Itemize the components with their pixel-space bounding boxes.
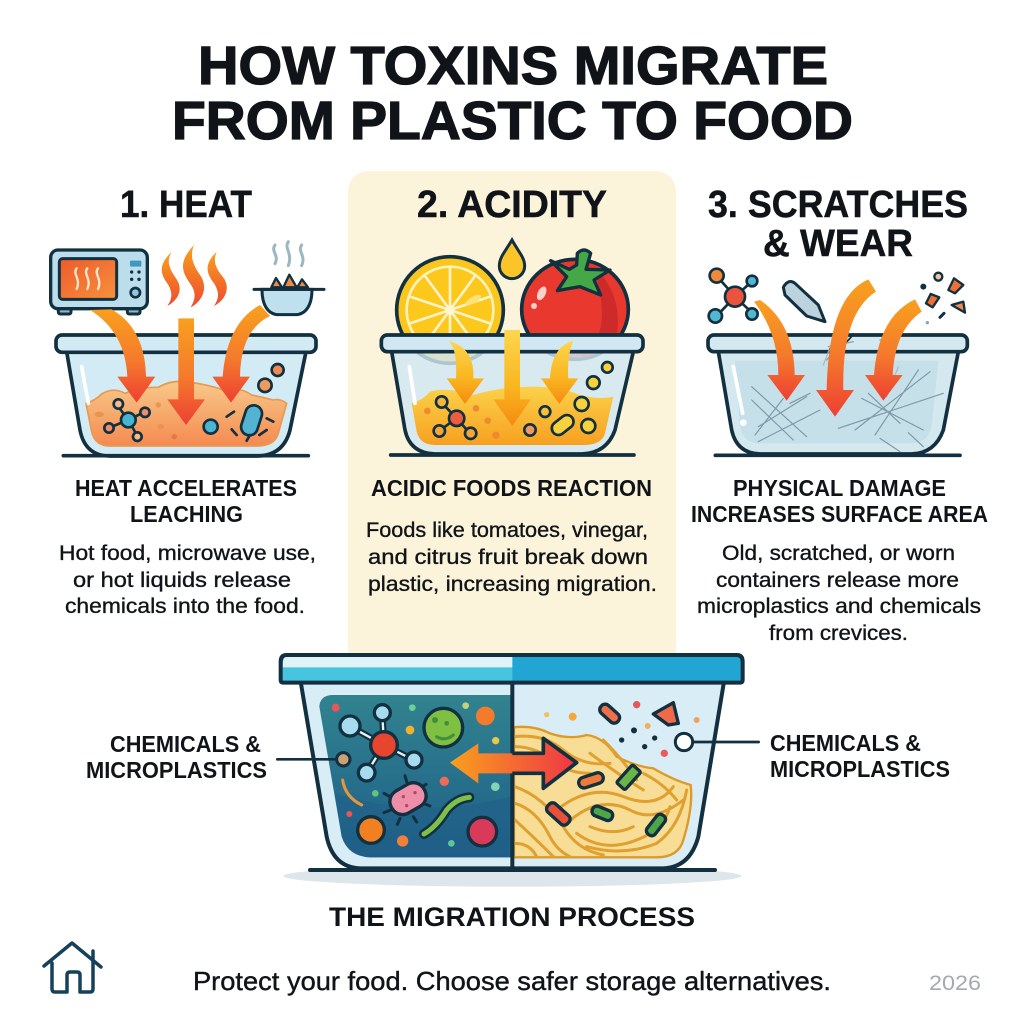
icon: microwave	[51, 250, 147, 314]
icon: house	[44, 943, 101, 992]
caption: the migration process: THE MIGRATION PROCESS	[329, 902, 695, 932]
text: acidity description	[366, 519, 657, 596]
text: heat description	[59, 542, 316, 618]
icon: plastic fragments	[920, 273, 965, 324]
subheading: heat accelerates leaching: HEAT ACCELERATES	[75, 475, 297, 501]
panel: contaminated left side	[319, 695, 511, 857]
label: chemicals and microplastics left: MICROPLASTICS	[86, 757, 267, 783]
illustration: scratches and wear	[708, 269, 967, 455]
illustration: migration process container	[277, 655, 759, 887]
title: HOW TOXINS MIGRATE	[198, 36, 828, 96]
icon: heat waves	[162, 245, 227, 307]
text: acidity description: and citrus fruit break down	[368, 546, 648, 569]
subheading: physical damage: INCREASES SURFACE AREA	[691, 501, 988, 527]
title: FROM PLASTIC TO FOOD	[172, 91, 853, 151]
icon: molecule	[709, 269, 758, 323]
icon: green microbe	[424, 708, 463, 747]
icon: lemon	[397, 257, 503, 363]
container body	[301, 682, 724, 868]
title	[172, 36, 853, 151]
particles in food	[95, 364, 284, 441]
subheading: physical damage: PHYSICAL DAMAGE	[733, 475, 946, 501]
arrows: heat into food	[90, 305, 270, 425]
subheading: acidic foods reaction: ACIDIC FOODS REACTION	[371, 475, 652, 501]
text: scratches description: from crevices.	[769, 622, 908, 645]
footer message: Protect your food. Choose safer storage alternatives.	[193, 966, 831, 996]
label: chemicals and microplastics right: MICROPLASTICS	[770, 756, 950, 782]
glass highlight on rim and divider	[281, 655, 743, 870]
heading: 3. scratches and wear: & WEAR	[763, 223, 913, 265]
subheading: physical damage	[691, 475, 988, 527]
illustration: acidity	[381, 240, 643, 455]
vegetable pieces	[545, 702, 678, 838]
arrows: migration through scratches	[754, 279, 922, 417]
text: scratches description: microplastics and chemicals	[697, 595, 981, 618]
text: scratches description: Old, scratched, or worn	[722, 542, 955, 565]
text: heat description: or hot liquids release	[73, 569, 291, 592]
icon: hot bowl	[254, 242, 324, 315]
orange curl	[343, 780, 362, 805]
arrows: acid into food	[447, 330, 578, 426]
text: scratches description: containers release more	[716, 569, 959, 592]
text: scratches description	[697, 542, 981, 645]
subheading: heat accelerates leaching: LEACHING	[130, 501, 243, 527]
icon: tomato	[522, 250, 628, 359]
callout lines	[277, 742, 759, 759]
spheres and particles	[332, 702, 500, 847]
year: 2026	[929, 972, 981, 995]
text: heat description: chemicals into the food.	[65, 595, 305, 618]
icon: molecule	[340, 705, 422, 781]
illustration: heat	[51, 242, 324, 456]
green worm	[424, 797, 469, 834]
shadow	[283, 865, 741, 887]
panel: food right side	[514, 701, 700, 857]
text: heat description: Hot food, microwave use,	[59, 542, 316, 565]
icon: pink bacterium	[384, 776, 430, 824]
container: scratches	[708, 335, 967, 455]
label: chemicals and microplastics right: CHEMICALS &	[770, 730, 921, 756]
heading: 1. heat: 1. HEAT	[120, 184, 252, 226]
icon: blade	[783, 282, 825, 322]
icon: molecule in food	[104, 399, 150, 441]
particles	[544, 701, 700, 757]
icon: molecule and particles	[424, 362, 613, 439]
scratches	[752, 330, 943, 452]
label: chemicals and microplastics left	[86, 731, 267, 783]
label: chemicals and microplastics left: CHEMICALS &	[110, 731, 261, 757]
label: chemicals and microplastics right	[770, 730, 950, 782]
container: acidity	[381, 335, 643, 455]
panel: acidity highlight background	[348, 171, 676, 655]
text: acidity description: Foods like tomatoes, vinegar,	[366, 519, 648, 542]
container: heat	[56, 335, 316, 456]
subheading: heat accelerates leaching	[75, 475, 297, 527]
text: acidity description: plastic, increasing migration.	[368, 573, 657, 596]
arrow: two-way migration	[450, 738, 577, 788]
heading: 2. acidity: 2. ACIDITY	[417, 184, 607, 226]
heading: 3. scratches and wear: 3. SCRATCHES	[708, 184, 968, 226]
icon: drop	[499, 240, 525, 279]
heading: 3. scratches and wear	[708, 184, 968, 265]
